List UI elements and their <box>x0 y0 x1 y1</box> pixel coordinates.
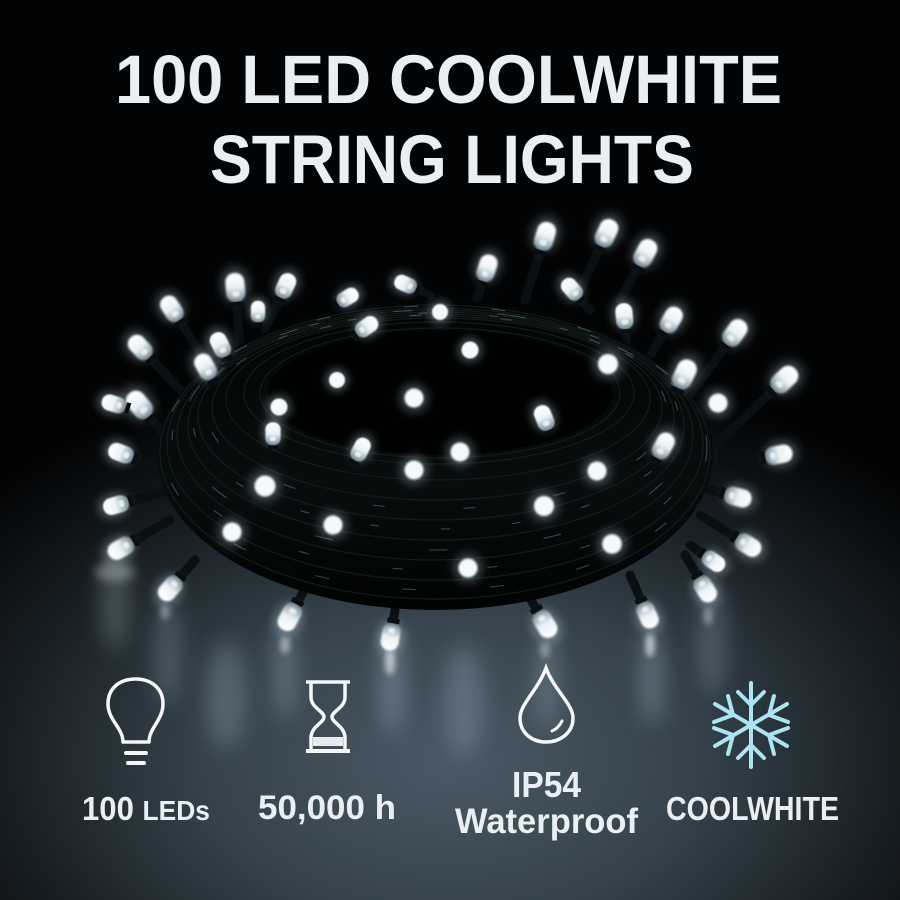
wires leading to outer LEDs <box>111 230 787 640</box>
icon: snowflake <box>714 683 788 767</box>
label: IP54 Waterproof <box>455 764 638 841</box>
label: 100 LEDs: 100 LEDs <box>82 790 210 827</box>
label: IP54 Waterproof: Waterproof <box>455 802 638 841</box>
LEDs facing forward on the ring <box>218 300 732 582</box>
icon: water drop <box>520 668 573 742</box>
label: 50,000 h: 50,000 h <box>258 789 396 827</box>
wire highlights <box>163 306 707 590</box>
icon: light bulb <box>108 679 163 763</box>
outer LED bulbs <box>94 209 810 658</box>
title: STRING LIGHTS <box>210 121 694 198</box>
icon: hourglass <box>306 682 350 753</box>
title <box>115 41 782 198</box>
coiled black wire ring <box>157 300 713 610</box>
label: COOLWHITE: COOLWHITE <box>666 790 839 827</box>
title: 100 LED COOLWHITE <box>115 41 782 118</box>
floor light reflections <box>95 550 726 755</box>
label: IP54 Waterproof: IP54 <box>512 764 581 805</box>
